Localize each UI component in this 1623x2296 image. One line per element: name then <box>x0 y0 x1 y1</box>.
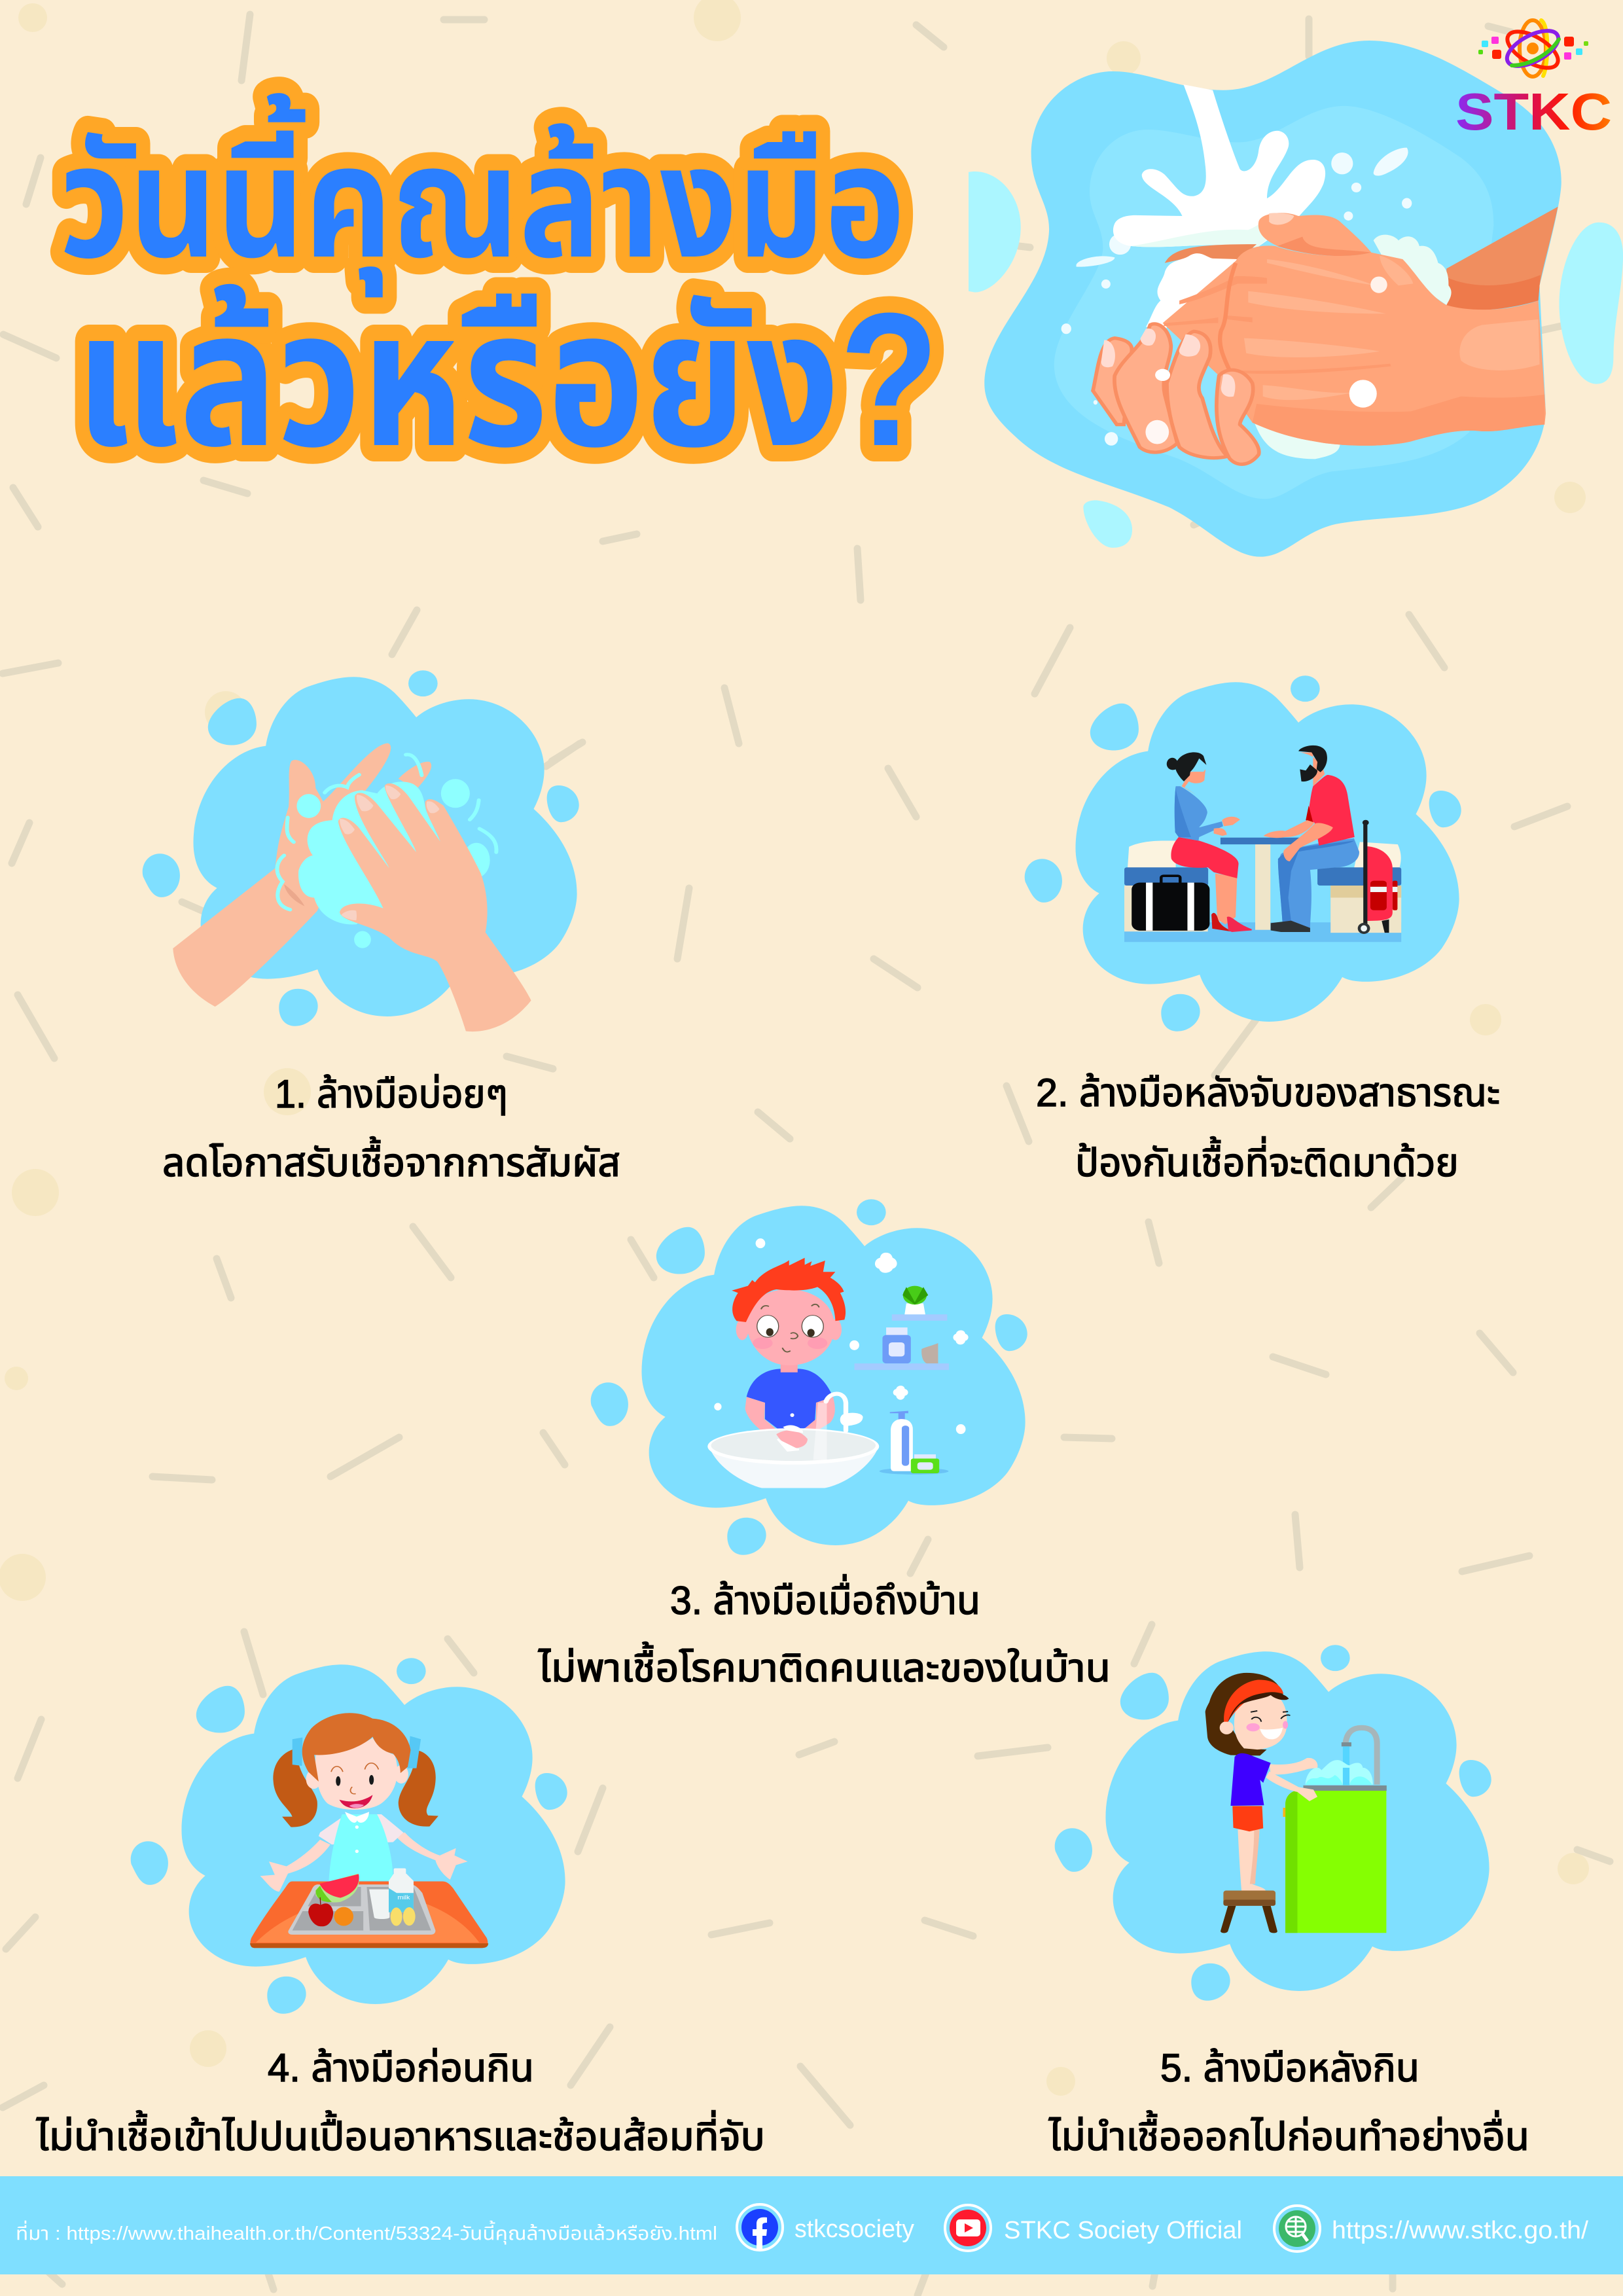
left finger back <box>399 762 431 789</box>
logo: STKC <box>1455 20 1612 141</box>
hero inner blob <box>1054 106 1493 499</box>
panel: step 1 illustration <box>143 670 579 1031</box>
facebook handle: stkcsociety <box>794 2215 914 2243</box>
shelves with plant, bottle and stone <box>855 1286 949 1370</box>
boy's hands with soap <box>776 1426 808 1450</box>
cloud background <box>131 1658 567 2014</box>
icon: youtube <box>945 2205 991 2251</box>
caption: step 4 <box>36 2046 765 2159</box>
back forearm <box>1446 207 1558 310</box>
caption: step 5: ไม่นำเชื้อออกไปก่อนทำอย่างอื่น <box>1048 2110 1529 2159</box>
caption: step 3: ไม่พาเชื้อโรคมาติดคนและของในบ้าน <box>538 1641 1111 1690</box>
boy <box>732 1258 846 1448</box>
girl's fringe <box>1228 1693 1289 1722</box>
logo wordmark: STKC <box>1455 82 1612 141</box>
title <box>60 93 939 486</box>
orange <box>334 1907 353 1926</box>
fingernails <box>340 785 439 920</box>
caption: step 1: 1. ล้างมือบ่อยๆ <box>275 1072 508 1116</box>
caption: step 5 <box>1048 2046 1529 2159</box>
caption: step 2: ป้องกันเชื้อที่จะติดมาด้วย <box>1075 1136 1459 1185</box>
title line 1: วันนี้คุณล้างมือ <box>60 93 905 298</box>
water droplet right <box>1559 223 1623 384</box>
caption: step 5: 5. ล้างมือหลังกิน <box>1160 2046 1419 2090</box>
main hand <box>1163 245 1546 446</box>
girl's hair bows <box>293 1736 421 1768</box>
hero background blob <box>984 41 1561 557</box>
right bench <box>1317 842 1401 933</box>
title line 2: แล้วหรือยัง? <box>75 274 939 486</box>
fingernails <box>1101 329 1235 397</box>
logo atom icon <box>1478 20 1588 77</box>
right hand <box>338 783 531 1031</box>
left bench <box>1124 841 1208 931</box>
cloud background <box>1025 675 1461 1031</box>
black suitcase <box>1132 876 1209 931</box>
icon: facebook <box>737 2204 783 2250</box>
website url: https://www.stkc.go.th/ <box>1332 2217 1588 2244</box>
apple <box>308 1897 333 1926</box>
foam bubbles on hands <box>1145 276 1387 444</box>
girl's purple shirt <box>1230 1753 1271 1806</box>
panel: step 4 illustration <box>131 1658 567 2014</box>
water droplet bottom <box>1083 500 1132 548</box>
milk carton and glass <box>369 1868 414 1919</box>
red backpack and trolley <box>1359 820 1397 933</box>
panel: step 2 illustration <box>1025 675 1461 1031</box>
food tray <box>288 1884 435 1935</box>
source text: ที่มา : https://www.thaihealth.or.th/Content/53324-วันนี้คุณล้างมือแล้วหรือยัง.html <box>16 2220 717 2244</box>
orange tray <box>250 1881 488 1948</box>
girl's face <box>1220 1695 1290 1749</box>
girl's head <box>302 1713 410 1810</box>
girl's pigtails <box>273 1748 438 1827</box>
palm crease <box>284 884 304 906</box>
boy's face <box>753 1304 827 1352</box>
soap bottle and soap dish <box>880 1411 948 1475</box>
girl's arms <box>260 1833 468 1892</box>
caption: step 2 <box>1036 1071 1500 1185</box>
panel: step 5 illustration <box>1055 1645 1491 2001</box>
watermelon <box>315 1874 359 1903</box>
girl's hair <box>1205 1673 1287 1755</box>
thumb <box>1258 213 1371 256</box>
caption: step 4: ไม่นำเชื้อเข้าไปปนเปื้อนอาหารและช้อนส้อมที่จับ <box>36 2110 765 2159</box>
wooden stool <box>1221 1890 1277 1933</box>
faucet <box>813 1394 863 1460</box>
wash basin <box>707 1428 879 1488</box>
lemons <box>391 1907 416 1926</box>
girl's red headband <box>1224 1680 1283 1722</box>
caption: step 1 <box>162 1072 620 1185</box>
girl's arms <box>1266 1758 1317 1801</box>
water droplet left <box>969 171 1021 293</box>
woman <box>1167 752 1252 932</box>
faucet and water <box>1306 1728 1377 1785</box>
man <box>1264 745 1359 932</box>
left hand <box>173 744 391 1007</box>
footer band <box>0 2176 1623 2274</box>
foam streaks <box>277 755 496 910</box>
girl's legs <box>1238 1829 1266 1898</box>
floor <box>1124 922 1401 942</box>
cloud background <box>143 670 579 1026</box>
panel: step 3 illustration <box>591 1199 1027 1555</box>
girl's body and apron <box>319 1812 403 1881</box>
girl's shorts <box>1232 1806 1263 1831</box>
youtube channel: STKC Society Official <box>1004 2217 1242 2244</box>
soap foam behind hands <box>1146 235 1452 459</box>
fingers <box>1093 324 1259 464</box>
table <box>1221 838 1301 930</box>
milk carton and glass: milk <box>397 1895 410 1901</box>
caption: step 1: ลดโอกาสรับเชื้อจากการสัมผัส <box>162 1136 620 1185</box>
water splash <box>1061 84 1412 446</box>
caption: step 3 <box>538 1574 1111 1690</box>
cloud background <box>591 1199 1027 1555</box>
green sink cabinet <box>1283 1785 1387 1933</box>
caption: step 4: 4. ล้างมือก่อนกิน <box>268 2046 534 2090</box>
icon: website <box>1274 2206 1320 2251</box>
soap foam <box>296 779 490 948</box>
caption: step 3: 3. ล้างมือเมื่อถึงบ้าน <box>670 1574 980 1623</box>
cloud background <box>1055 1645 1491 2001</box>
caption: step 2: 2. ล้างมือหลังจับของสาธารณะ <box>1036 1071 1500 1115</box>
soap bubbles <box>714 1238 969 1434</box>
hero illustration: hands washing under water <box>969 41 1623 557</box>
